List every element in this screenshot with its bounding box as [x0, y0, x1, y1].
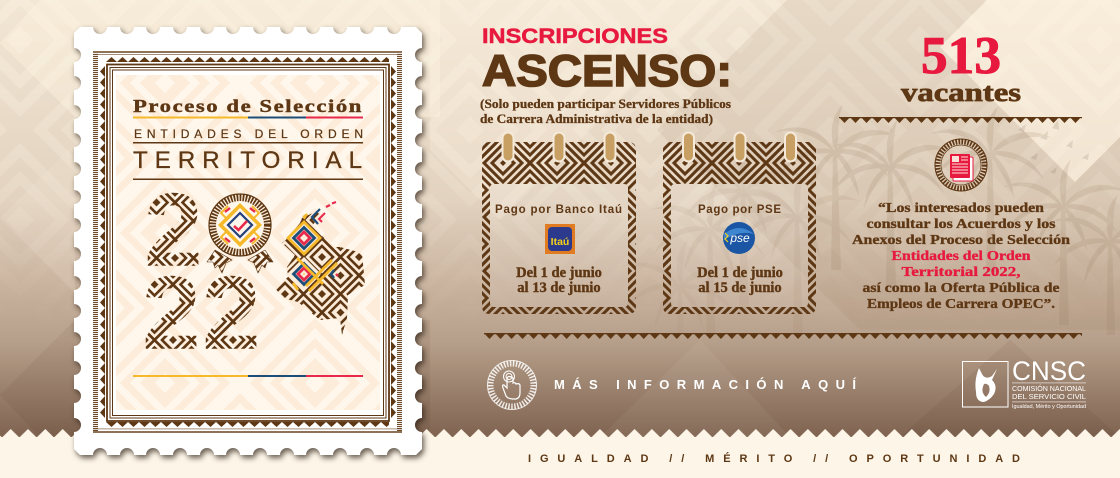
tricolor rule: [133, 116, 363, 118]
dates: Del 1 de junio: [697, 265, 783, 281]
title: Inscripciones: INSCRIPCIONES: [482, 25, 668, 48]
quote text: así como la Oferta Pública de: [862, 281, 1060, 296]
stamp: [74, 27, 422, 455]
palm trees silhouette: [652, 105, 1120, 335]
icon: Itaú logo: Itaú: [551, 236, 569, 248]
map of Colombia: [275, 202, 365, 335]
calendar: PSE: [663, 132, 816, 314]
dates: [516, 265, 602, 296]
subtitle: [480, 97, 731, 126]
dates: Del 1 de junio: [516, 265, 602, 281]
quote text: consultar los Acuerdos y los: [866, 217, 1056, 232]
icon: document: [935, 139, 987, 191]
calendar rings: [502, 132, 616, 162]
CNSC logo: COMISIÓN NACIONAL: [1012, 384, 1086, 393]
calendar: Banco Itaú: [482, 132, 636, 314]
icon: PSE logo: [723, 222, 755, 254]
quote text: Anexos del Proceso de Selección: [852, 233, 1070, 248]
icon: Itaú logo: [545, 224, 575, 254]
quote text: Empleos de Carrera OPEC”.: [867, 297, 1055, 312]
vacancies label: vacantes: [901, 78, 1021, 107]
medallion replacing zero: [207, 194, 273, 273]
tricolor rule bottom: [133, 375, 363, 377]
number 2022 patterned: [143, 173, 260, 370]
number 2022 patterned: 2: [145, 173, 202, 287]
quote text: “Los interesados pueden: [878, 201, 1044, 216]
subtitle: (Solo pueden participar Servidores Públicos: [480, 97, 731, 111]
bottom zigzag edge: [0, 429, 1120, 438]
dates: al 15 de junio: [698, 280, 782, 296]
stamp ornamental frame: [93, 51, 402, 433]
vacancies number: 513: [921, 27, 1001, 85]
title: Ascenso: ASCENSO:: [482, 47, 732, 96]
heading: Territorial: TERRITORIAL: [133, 147, 362, 174]
CNSC logo: Igualdad, Mérito y Oportunidad: [1012, 404, 1086, 410]
icon: PSE logo: pse: [729, 231, 750, 245]
dates: al 13 de junio: [517, 280, 601, 296]
CNSC logo: DEL SERVICIO CIVIL: [1012, 392, 1086, 401]
calendar rings: [683, 132, 796, 162]
stamp cream panel: [116, 75, 380, 410]
number 2022 patterned: 2: [203, 256, 260, 370]
footer motto: IGUALDAD // MÉRITO // OPORTUNIDAD: [528, 452, 1020, 465]
subtitle: de Carrera Administrativa de la entidad): [480, 112, 713, 126]
dates: [697, 265, 783, 296]
quote text: Entidades del Orden: [892, 249, 1031, 264]
payment label: Pago por Banco Itaú: [495, 204, 622, 216]
quote text: [852, 201, 1070, 312]
link: más información: MÁS INFORMACIÓN AQUÍ: [554, 377, 856, 392]
stamp paper with perforations: [74, 27, 422, 455]
number 2022 patterned: 2: [143, 256, 200, 370]
CNSC logo: [962, 356, 1086, 410]
payment label: Pago por PSE: [698, 204, 781, 216]
CNSC logo: CNSC: [1012, 356, 1086, 386]
quote text: Territorial 2022,: [902, 265, 1020, 280]
heading: Proceso de Selección: Proceso de Selección: [133, 96, 363, 116]
icon: hand pointer: [488, 360, 536, 410]
heading: Entidades del Orden: ENTIDADES DEL ORDEN: [134, 127, 363, 141]
